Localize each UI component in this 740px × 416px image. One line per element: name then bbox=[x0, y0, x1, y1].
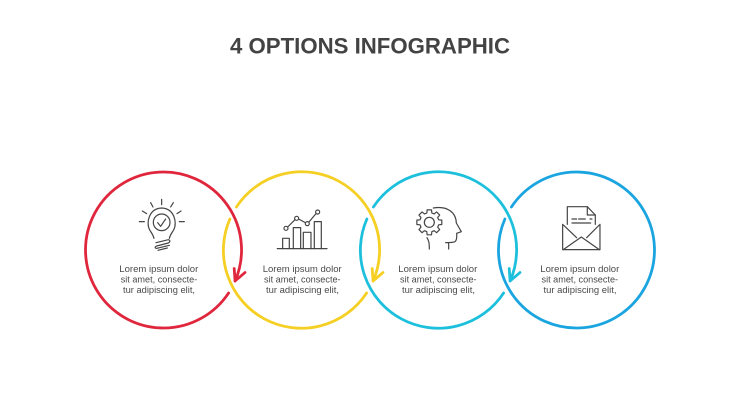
icon: head with gear bbox=[417, 208, 461, 249]
title: 4 OPTIONS INFOGRAPHIC bbox=[230, 34, 510, 58]
yellow circular arrow bbox=[223, 172, 383, 328]
text: option 4 bbox=[540, 264, 620, 296]
text: option 3: tur adipiscing elit, bbox=[402, 285, 475, 296]
panel: option 4 bbox=[498, 172, 654, 328]
text: option 1 bbox=[119, 264, 199, 296]
text: option 1: Lorem ipsum dolor bbox=[119, 264, 199, 275]
text: option 1: tur adipiscing elit, bbox=[123, 285, 195, 296]
cyan circular arrow bbox=[360, 172, 520, 328]
text: option 2: Lorem ipsum dolor bbox=[263, 264, 342, 275]
text: option 4: tur adipiscing elit, bbox=[544, 285, 616, 296]
text: option 4: Lorem ipsum dolor bbox=[540, 264, 620, 275]
red circular arrow bbox=[86, 172, 245, 328]
panel: option 1 bbox=[86, 172, 245, 328]
panel: option 2 bbox=[223, 172, 383, 328]
text: option 3 bbox=[398, 264, 478, 296]
icon: envelope with document bbox=[563, 207, 600, 250]
icon: bar chart with trend line bbox=[277, 210, 327, 249]
text: option 2: sit amet, consecte- bbox=[264, 274, 341, 286]
text: option 3: sit amet, consecte- bbox=[400, 274, 477, 286]
text: option 4: sit amet, consecte- bbox=[542, 274, 618, 286]
text: option 1: sit amet, consecte- bbox=[121, 274, 197, 286]
panel: option 3 bbox=[360, 172, 520, 328]
text: option 2: tur adipiscing elit, bbox=[266, 285, 339, 296]
text: option 2 bbox=[263, 264, 342, 296]
icon: light bulb with check bbox=[139, 199, 184, 250]
blue circular arrow bbox=[498, 172, 654, 328]
text: option 3: Lorem ipsum dolor bbox=[398, 264, 478, 275]
